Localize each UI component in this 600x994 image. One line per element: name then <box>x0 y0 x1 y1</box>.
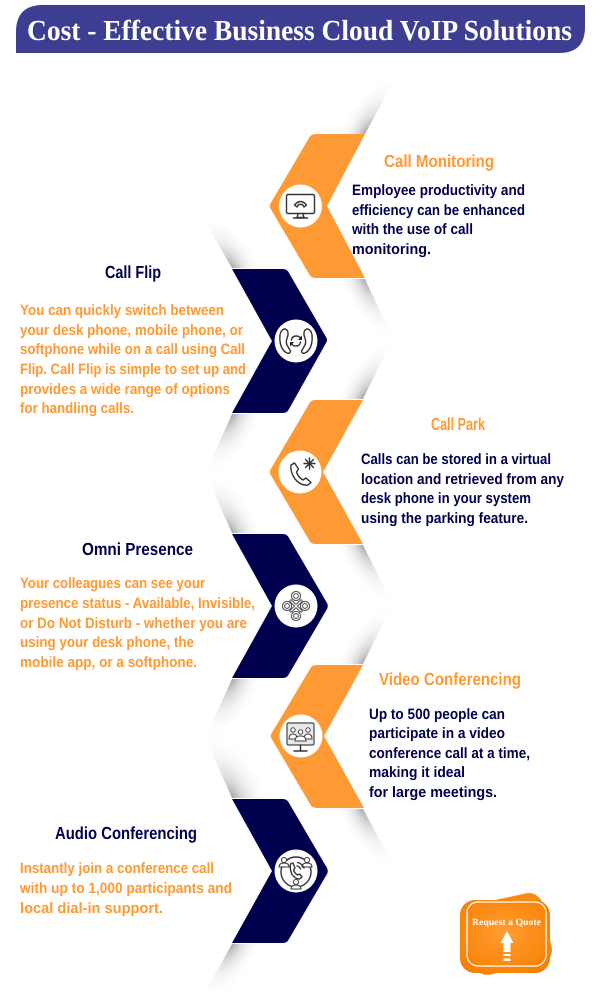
heading: Omni Presence <box>82 539 193 559</box>
text block: Employee productivity and <box>352 182 525 199</box>
text block: location and retrieved from any <box>361 471 565 488</box>
text block: Flip. Call Flip is simple to set up and <box>20 361 246 378</box>
title banner <box>16 5 585 53</box>
text block: softphone while on a call using Call <box>20 341 245 358</box>
text block: with the use of call <box>351 221 473 238</box>
orange chevron <box>270 400 363 544</box>
text block <box>361 451 565 527</box>
text block <box>369 706 530 801</box>
panel: call monitoring <box>270 134 525 278</box>
panel: video conferencing <box>271 665 530 808</box>
icon: monitor with phone <box>279 184 322 228</box>
text block: conference call at a time, <box>369 745 530 762</box>
text block: or Do Not Disturb - whether you are <box>20 615 247 632</box>
panel: call flip <box>20 262 327 417</box>
navy chevron <box>232 799 328 943</box>
text block: You can quickly switch between <box>20 302 224 319</box>
text block: provides a wide range of options <box>20 381 230 398</box>
text block: Calls can be stored in a virtual <box>361 451 551 468</box>
icon: phone with asterisk <box>278 450 322 494</box>
icon: up arrow <box>500 931 514 961</box>
text block: for handling calls. <box>20 400 134 417</box>
icon: two handsets with swap arrows <box>274 320 318 362</box>
text block: efficiency can be enhanced <box>352 202 525 219</box>
text block: mobile app, or a softphone. <box>20 654 197 671</box>
panel: omni presence <box>20 534 328 678</box>
heading: Call Flip <box>105 262 161 282</box>
navy chevron <box>232 269 327 413</box>
text block: desk phone in your system <box>361 490 531 507</box>
heading: Call Park <box>431 414 485 434</box>
orange chevron <box>270 134 365 278</box>
icon: endless knot <box>274 584 318 628</box>
text block <box>20 302 246 417</box>
text block: Instantly join a conference call <box>20 860 214 877</box>
heading: Call Monitoring <box>384 151 494 171</box>
ribbon fold shadows <box>174 68 416 994</box>
text block: participate in a video <box>369 725 505 742</box>
icon: conference circle with phone <box>274 850 318 892</box>
text block <box>20 575 255 671</box>
text block: with up to 1,000 participants and <box>19 880 232 897</box>
text block: making it ideal <box>369 764 465 781</box>
title banner: Cost - Effective Business Cloud VoIP Solutions <box>27 15 572 47</box>
text block: for large meetings. <box>369 784 497 801</box>
text block: Your colleagues can see your <box>20 575 205 592</box>
text block <box>19 860 232 917</box>
text block: using your desk phone, the <box>20 634 194 651</box>
text block: local dial-in support. <box>20 900 163 917</box>
text block <box>351 182 525 258</box>
text block: monitoring. <box>352 241 431 258</box>
button: request a quote <box>460 890 555 978</box>
orange chevron <box>271 665 364 808</box>
text block: Up to 500 people can <box>369 706 505 723</box>
navy chevron <box>232 534 328 678</box>
text block: using the parking feature. <box>361 510 528 527</box>
text block: your desk phone, mobile phone, or <box>20 322 243 339</box>
heading: Audio Conferencing <box>55 823 197 843</box>
text block: presence status - Available, Invisible, <box>20 595 255 612</box>
panel: audio conferencing <box>19 799 328 943</box>
heading: Video Conferencing <box>379 669 521 689</box>
button: request a quote: Request a Quote <box>472 918 541 928</box>
icon: monitor with participants <box>280 714 322 758</box>
panel: call park <box>270 400 565 544</box>
